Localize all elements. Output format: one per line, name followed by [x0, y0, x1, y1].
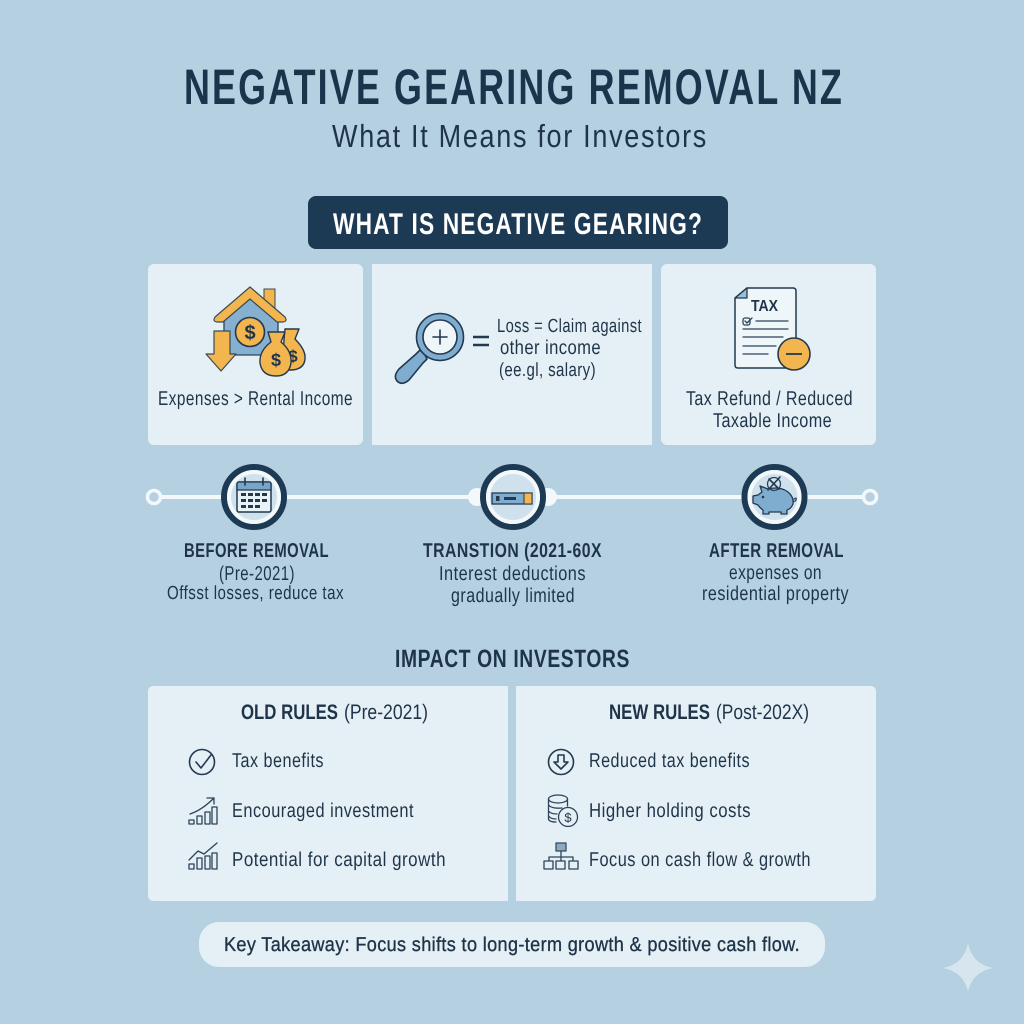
- panel: new rules: [516, 686, 876, 901]
- timeline step: transition: Interest deductions: [439, 563, 586, 585]
- list item: focus on cash flow and growth: Focus on cash flow & growth: [589, 849, 811, 871]
- panel heading: [609, 701, 809, 724]
- label: Tax Refund / Reduced: [686, 388, 853, 410]
- panel: expenses exceed rental income: [148, 264, 363, 445]
- panel heading: OLD RULES: [241, 701, 338, 724]
- icon: progress bar: [483, 467, 543, 527]
- icon: tax document: [735, 288, 810, 370]
- icon: house with money bags: $: [288, 347, 298, 366]
- icon: calendar: [224, 467, 284, 527]
- icon: house with money bags: $: [244, 322, 256, 344]
- list item: potential for capital growth: Potential for capital growth: [232, 849, 446, 871]
- timeline step: after removal: residential property: [702, 583, 849, 605]
- callout: key takeaway: Key Takeaway: Focus shifts to long-term growth & positive cash flow.: [224, 934, 800, 956]
- timeline step: after removal: [702, 540, 849, 605]
- callout: key takeaway: [199, 922, 825, 967]
- icon: equals sign: [473, 337, 489, 345]
- label: Expenses > Rental Income: [158, 388, 353, 410]
- timeline step: after removal: AFTER REMOVAL: [709, 540, 844, 562]
- label: [686, 388, 853, 432]
- panel: tax refund: [661, 264, 876, 445]
- explanation text: Loss = Claim against: [497, 316, 642, 337]
- list item: reduced tax benefits: Reduced tax benefits: [589, 750, 750, 772]
- explanation text: other income: [500, 337, 601, 359]
- list item: reduced tax benefits: [548, 750, 750, 774]
- timeline step: transition: gradually limited: [451, 585, 575, 607]
- list item: higher holding costs: [548, 795, 751, 826]
- section heading: what is negative gearing: WHAT IS NEGATIVE GEARING?: [333, 208, 703, 241]
- panel heading: [241, 701, 428, 724]
- heading: impact on investors: IMPACT ON INVESTORS: [395, 645, 630, 673]
- panel: old rules: [148, 686, 508, 901]
- list item: potential for capital growth: [189, 843, 446, 871]
- list item: tax benefits: [190, 750, 324, 774]
- subtitle: What It Means for Investors: [332, 118, 708, 154]
- icon: house with money bags: $: [271, 350, 281, 370]
- list item: tax benefits: Tax benefits: [232, 750, 324, 772]
- panel heading: NEW RULES: [609, 701, 710, 724]
- timeline step: transition: [423, 540, 602, 607]
- icon: magnifying glass: [395, 314, 464, 383]
- list item: encouraged investment: [189, 798, 414, 824]
- timeline step: after removal: expenses on: [729, 562, 822, 584]
- list item: focus on cash flow and growth: [544, 843, 811, 871]
- icon: house with money bags: [206, 287, 305, 376]
- timeline: [148, 467, 876, 527]
- icon: piggy bank: [744, 467, 804, 527]
- explanation text: (ee.gl, salary): [499, 360, 596, 381]
- timeline step: before removal: BEFORE REMOVAL: [184, 540, 329, 562]
- panel heading: (Post-202X): [716, 701, 809, 724]
- panel heading: (Pre-2021): [344, 701, 428, 724]
- timeline step: transition: TRANSTION (2021-60X: [423, 540, 602, 562]
- timeline step: before removal: Offsst losses, reduce tax: [167, 583, 344, 604]
- timeline step: before removal: (Pre-2021): [219, 563, 295, 585]
- icon: tax document: TAX: [751, 298, 778, 315]
- label: Taxable Income: [713, 410, 832, 432]
- timeline step: before removal: [167, 540, 344, 604]
- explanation text: [497, 316, 642, 381]
- panel: loss claim against other income: [372, 264, 652, 445]
- list item: higher holding costs: $: [564, 810, 572, 825]
- list item: higher holding costs: Higher holding costs: [589, 800, 751, 822]
- section heading: what is negative gearing: [308, 196, 728, 249]
- list item: encouraged investment: Encouraged investment: [232, 800, 414, 822]
- icon: sparkle: [943, 943, 993, 992]
